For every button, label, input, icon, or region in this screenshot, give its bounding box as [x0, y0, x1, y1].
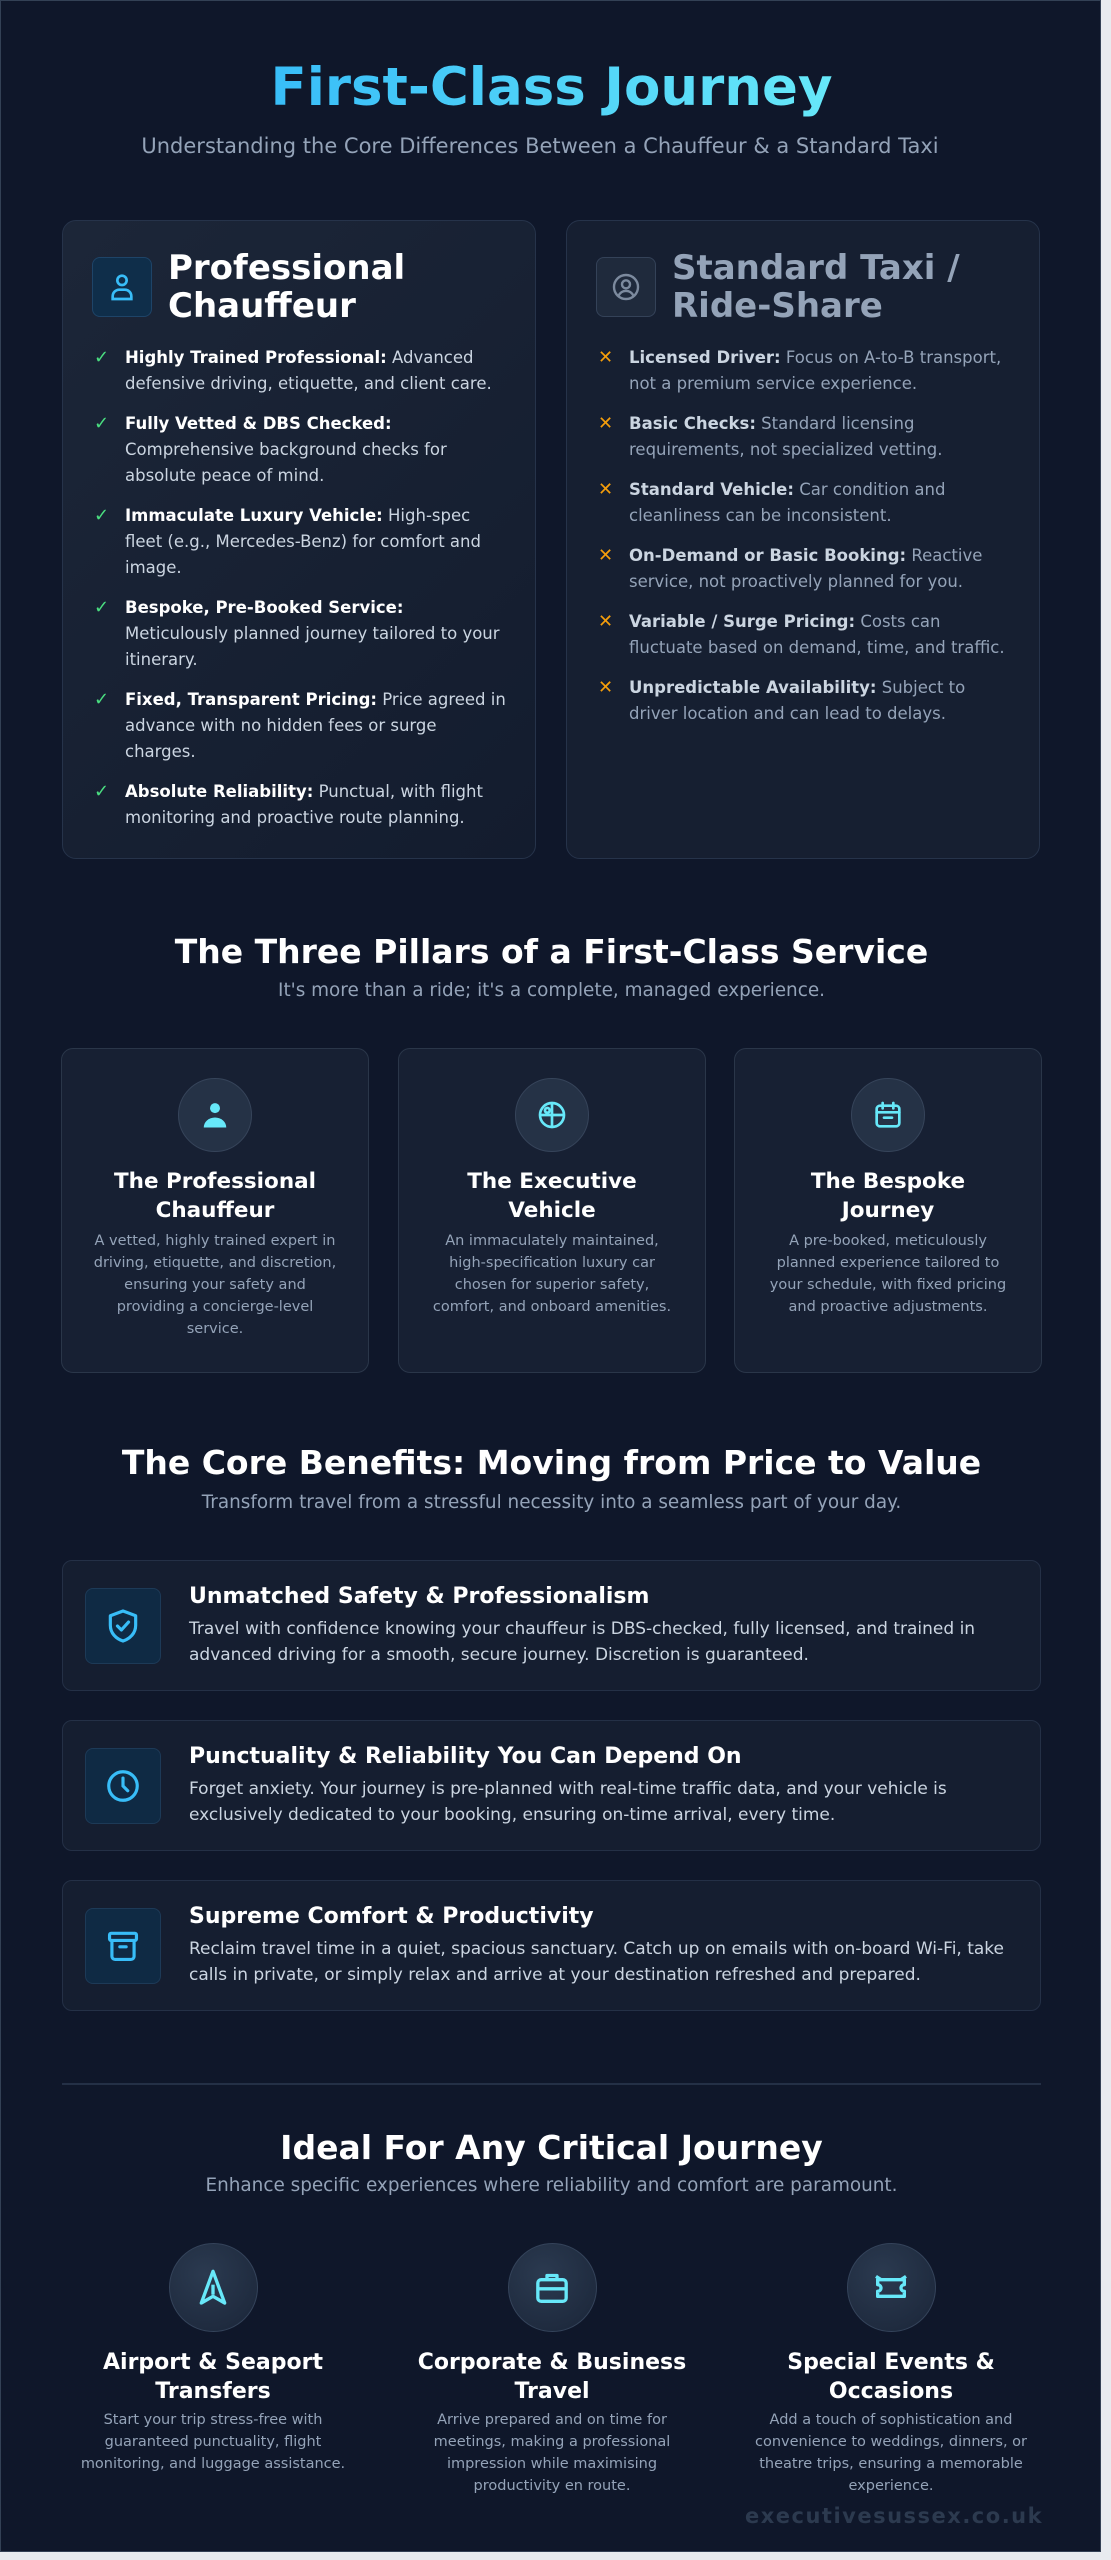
list: taxi drawbacks: ✕	[598, 611, 613, 632]
panel: pillar chauffeur: The Professional Chauffeur	[114, 1169, 316, 1223]
list: chauffeur advantages: ✓	[94, 689, 109, 710]
icon: shield	[85, 1588, 161, 1664]
panel: benefit comfort	[62, 1880, 1041, 2011]
icon: briefcase	[508, 2243, 596, 2332]
column: corporate: Corporate & Business Travel	[418, 2350, 686, 2404]
list: taxi drawbacks: ✕	[598, 677, 613, 698]
panel: benefit punctuality: Forget anxiety. Your journey is pre-planned with real-time traffic data, and your vehicle is exclusively dedicated to your booking, ensuring on-time arrival, every time.	[189, 1779, 947, 1825]
panel: pillar journey	[734, 1048, 1042, 1373]
panel: pillar vehicle: The Executive Vehicle	[467, 1169, 637, 1223]
panel: benefit punctuality: Punctuality & Reliability You Can Depend On	[189, 1744, 742, 1769]
panel: pillar vehicle: An immaculately maintained, high-specification luxury car chosen for superior safety, comfort, and onboard amenities.	[433, 1233, 671, 1315]
heading: professional chauffeur: Chauffeur	[168, 286, 356, 326]
heading: ideal for: Ideal For Any Critical Journey	[280, 2128, 823, 2167]
icon: clock	[85, 1748, 161, 1824]
column: airport: Start your trip stress-free with guaranteed punctuality, flight monitoring, and luggage assistance.	[81, 2412, 345, 2472]
list: chauffeur advantages: ✓	[94, 505, 109, 526]
heading: standard taxi	[596, 248, 960, 326]
heading: core benefits: The Core Benefits: Moving from Price to Value	[122, 1443, 981, 1482]
panel: pillar chauffeur	[61, 1048, 369, 1373]
subheading: ideal for: Enhance specific experiences where reliability and comfort are paramount.	[205, 2175, 898, 2196]
list: chauffeur advantages: ✓	[94, 347, 109, 368]
icon: navigation	[168, 2243, 258, 2332]
icon: calendar	[851, 1078, 925, 1152]
panel: benefit comfort: Supreme Comfort & Productivity	[189, 1904, 594, 1929]
heading: three pillars: The Three Pillars of a First-Class Service	[175, 932, 928, 971]
list: chauffeur advantages: ✓	[94, 781, 109, 802]
heading: professional chauffeur	[92, 248, 405, 326]
list: taxi drawbacks	[598, 347, 1005, 723]
panel: benefit safety: Unmatched Safety & Professionalism	[189, 1584, 649, 1609]
panel: pillar vehicle	[398, 1048, 706, 1373]
panel: pillar chauffeur: A vetted, highly trained expert in driving, etiquette, and discretion, ensuring your safety and providing a concierge-level service.	[94, 1233, 336, 1337]
column: events: Add a touch of sophistication and convenience to weddings, dinners, or theatre trips, ensuring a memorable experience.	[755, 2412, 1027, 2494]
panel: pillar journey: A pre-booked, meticulously planned experience tailored to your schedule, with fixed pricing and proactive adjustments.	[770, 1233, 1006, 1315]
heading: professional chauffeur: Professional	[168, 248, 405, 288]
column: airport: Airport & Seaport Transfers	[103, 2350, 323, 2404]
list: taxi drawbacks: Variable / Surge Pricing: Costs can fluctuate based on demand, time, and traffic.	[629, 612, 1005, 657]
list: chauffeur advantages: Bespoke, Pre-Booked Service: Meticulously planned journey tailored to your itinerary.	[125, 598, 500, 669]
heading: standard taxi: Ride-Share	[672, 286, 883, 326]
list: chauffeur advantages: ✓	[94, 597, 109, 618]
column: events: Special Events & Occasions	[787, 2350, 995, 2404]
title: First-Class Journey	[270, 57, 832, 118]
list: chauffeur advantages: ✓	[94, 413, 109, 434]
list: taxi drawbacks: Basic Checks: Standard licensing requirements, not specialized vetting.	[629, 414, 942, 459]
icon: archive	[85, 1908, 161, 1984]
panel: benefit punctuality	[62, 1720, 1041, 1851]
subheading: core benefits: Transform travel from a stressful necessity into a seamless part of your day.	[202, 1492, 901, 1513]
panel: benefit safety	[62, 1560, 1041, 1691]
icon: person	[178, 1078, 252, 1152]
list: taxi drawbacks: Unpredictable Availability: Subject to driver location and can lead to delays.	[629, 678, 965, 723]
column: events	[755, 2243, 1027, 2494]
panel: benefit safety: Travel with confidence knowing your chauffeur is DBS-checked, fully licensed, and trained in advanced driving for a smooth, secure journey. Discretion is guaranteed.	[189, 1619, 975, 1665]
icon: ticket	[846, 2243, 936, 2332]
list: taxi drawbacks: Licensed Driver: Focus on A-to-B transport, not a premium service experience.	[629, 348, 1001, 393]
icon: wheel	[515, 1078, 589, 1152]
column: corporate: Arrive prepared and on time for meetings, making a professional impression while maximising productivity en route.	[434, 2412, 670, 2494]
list: chauffeur advantages: Fixed, Transparent Pricing: Price agreed in advance with no hidden fees or surge charges.	[125, 690, 506, 761]
heading: standard taxi: Standard Taxi /	[672, 248, 960, 288]
watermark: executivesussex.co.uk	[745, 2504, 1043, 2528]
list: chauffeur advantages: Highly Trained Professional: Advanced defensive driving, etiquette, and client care.	[125, 348, 492, 393]
list: taxi drawbacks: ✕	[598, 413, 613, 434]
list: taxi drawbacks: ✕	[598, 545, 613, 566]
panel: standard taxi	[566, 220, 1040, 859]
column: corporate	[418, 2243, 686, 2494]
list: chauffeur advantages: Fully Vetted & DBS Checked: Comprehensive background checks for absolute peace of mind.	[125, 414, 447, 485]
subtitle: Understanding the Core Differences Between a Chauffeur & a Standard Taxi	[141, 134, 939, 158]
panel: professional chauffeur	[62, 220, 536, 859]
list: taxi drawbacks: ✕	[598, 347, 613, 368]
list: taxi drawbacks: Standard Vehicle: Car condition and cleanliness can be inconsistent.	[629, 480, 945, 525]
subheading: three pillars: It's more than a ride; it's a complete, managed experience.	[278, 980, 825, 1001]
list: chauffeur advantages	[94, 347, 506, 827]
list: chauffeur advantages: Immaculate Luxury Vehicle: High-spec fleet (e.g., Mercedes-Benz) for comfort and image.	[125, 506, 481, 577]
list: taxi drawbacks: On-Demand or Basic Booking: Reactive service, not proactively planned for you.	[629, 546, 982, 591]
panel: pillar journey: The Bespoke Journey	[811, 1169, 965, 1223]
column: airport	[81, 2243, 345, 2472]
panel: benefit comfort: Reclaim travel time in a quiet, spacious sanctuary. Catch up on emails with on-board Wi-Fi, take calls in private, or simply relax and arrive at your destination refreshed and prepared.	[189, 1939, 1004, 1985]
list: taxi drawbacks: ✕	[598, 479, 613, 500]
list: chauffeur advantages: Absolute Reliability: Punctual, with flight monitoring and proactive route planning.	[125, 782, 483, 827]
